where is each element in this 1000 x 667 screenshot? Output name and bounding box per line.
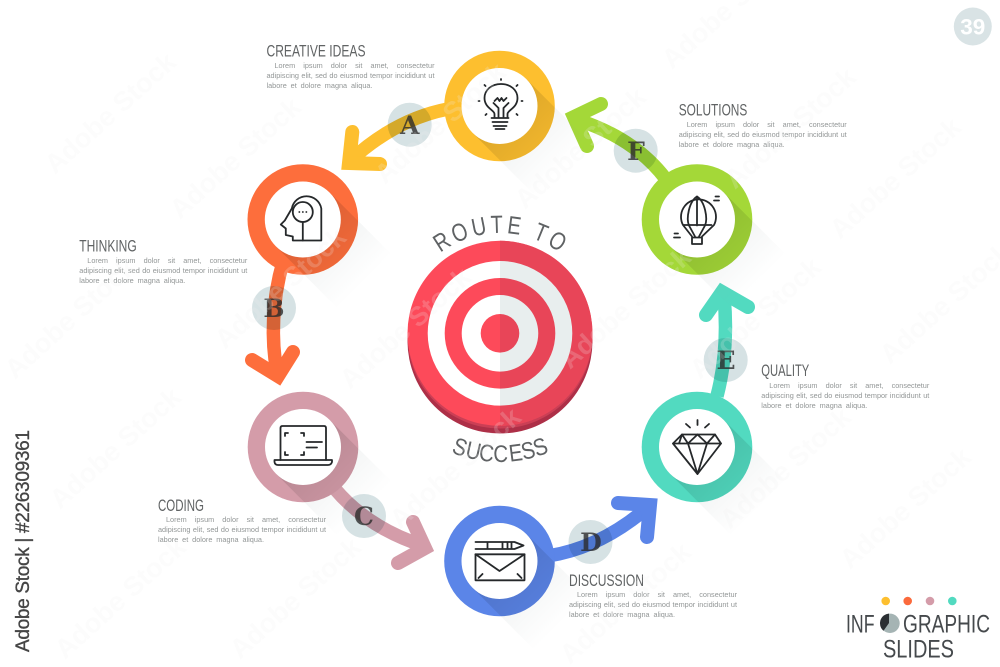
- icon: hot air balloon: [674, 196, 719, 244]
- heading: quality: QUALITY: [761, 362, 809, 380]
- badge D: [568, 520, 612, 564]
- heading: solutions: SOLUTIONS: [679, 102, 747, 120]
- stock credit: Adobe Stock | #226309361: [13, 430, 34, 652]
- text block: creative ideas: [266, 60, 434, 90]
- text block: solutions: adipiscing elit, sed do eiusmod tempor incididunt ut: [679, 130, 847, 138]
- text block: thinking: Lorem ipsum dolor sit amet, consectetur: [87, 256, 247, 265]
- curved heading: route to: T: [490, 211, 503, 239]
- arrow D: blue, discussion to quality: [548, 503, 650, 556]
- text block: coding: labore et dolore magna aliqua.: [158, 534, 264, 544]
- text block: thinking: adipiscing elit, sed do eiusmod tempor incididunt ut: [79, 266, 247, 275]
- arrow E: teal, quality to solutions: [706, 292, 748, 396]
- heading: thinking: THINKING: [79, 238, 137, 256]
- badge E: E: [716, 346, 736, 375]
- step ring: yellow with bulb icon: [444, 50, 562, 168]
- text: Adobe Stock: [0, 251, 142, 384]
- icon: envelope and pencil: [476, 542, 524, 580]
- text block: coding: [158, 514, 326, 544]
- central target: [408, 241, 592, 433]
- text block: discussion: adipiscing elit, sed do eiusmod tempor incididunt ut: [569, 600, 737, 609]
- badge A: [388, 103, 432, 147]
- page number badge: [954, 8, 992, 46]
- curved heading: route to: E: [506, 211, 523, 240]
- text: Adobe Stock: [714, 401, 857, 534]
- text block: discussion: Lorem ipsum dolor sit amet, consectetur: [577, 590, 737, 599]
- curved heading: success: U: [463, 436, 484, 466]
- text: Adobe Stock: [824, 111, 967, 244]
- curved heading: route to: O: [544, 225, 571, 257]
- badge F: [614, 129, 658, 173]
- badge C: [342, 494, 386, 538]
- badge A: A: [399, 111, 420, 140]
- text: Adobe Stock: [334, 261, 477, 394]
- text: Adobe Stock: [554, 536, 697, 667]
- curved heading: route to: [428, 211, 571, 257]
- text: Adobe Stock: [224, 531, 367, 664]
- curved heading: route to: R: [428, 226, 455, 257]
- step ring: orange with head icon: [248, 164, 364, 282]
- page number badge: 39: [960, 14, 985, 40]
- text block: quality: labore et dolore magna aliqua.: [761, 401, 867, 410]
- text: Adobe Stock: [369, 56, 512, 189]
- curved heading: success: E: [507, 439, 524, 467]
- text block: solutions: [679, 120, 847, 148]
- badge B: [252, 286, 296, 330]
- arrow C: pink, coding to discussion: [335, 489, 425, 563]
- target side edge: [408, 333, 592, 433]
- text block: thinking: labore et dolore magna aliqua.: [79, 276, 185, 285]
- curved heading: success: [449, 432, 551, 467]
- icon: laptop: [274, 426, 332, 465]
- text block: coding: adipiscing elit, sed do eiusmod tempor incididunt ut: [158, 524, 326, 534]
- badge C: C: [354, 502, 374, 531]
- logo: infographic slides: [846, 597, 990, 664]
- step ring: teal with diamond icon: [642, 392, 760, 510]
- badge E: [704, 338, 748, 382]
- text block: quality: [761, 381, 930, 410]
- text block: coding: Lorem ipsum dolor sit amet, consectetur: [166, 514, 326, 524]
- curved heading: success: S: [529, 432, 551, 462]
- step ring: pink with laptop icon: [248, 392, 366, 510]
- step ring: blue with envelope and pencil icon: [444, 506, 562, 624]
- badge B: B: [263, 294, 285, 323]
- text: Adobe Stock: [39, 46, 182, 179]
- text: Adobe Stock: [554, 241, 697, 374]
- icon: head with speech: [281, 196, 321, 240]
- text block: quality: Lorem ipsum dolor sit amet, consectetur: [769, 381, 929, 390]
- icon: diamond: [673, 420, 721, 474]
- text block: quality: adipiscing elit, sed do eiusmod tempor incididunt ut: [761, 391, 929, 400]
- curved heading: route to: U: [469, 212, 489, 242]
- icon: light bulb: [478, 79, 522, 129]
- curved heading: success: C: [493, 440, 508, 467]
- curved heading: success: C: [478, 439, 495, 467]
- badge F: F: [627, 137, 645, 166]
- text block: creative ideas: labore et dolore magna aliqua.: [266, 80, 372, 90]
- target shaded right half: [500, 241, 592, 426]
- badge D: D: [580, 528, 602, 557]
- text: Adobe Stock: [684, 251, 827, 384]
- text block: discussion: [569, 590, 737, 619]
- text: Adobe Stock: [834, 441, 977, 574]
- curved heading: success: S: [449, 432, 471, 462]
- text: Adobe Stock: [164, 91, 307, 224]
- text: Adobe Stock: [209, 221, 352, 354]
- text: Adobe Stock: [44, 381, 187, 514]
- arrow F: green, solutions to creative ideas: [574, 104, 665, 178]
- text: Adobe Stock: [509, 81, 652, 214]
- text block: creative ideas: Lorem ipsum dolor sit amet, consectetur: [274, 60, 434, 70]
- logo: infographic slides: INF: [846, 610, 874, 638]
- curved heading: route to: O: [447, 217, 472, 248]
- logo: infographic slides: SLIDES: [883, 636, 954, 664]
- text block: thinking: [79, 256, 248, 285]
- text block: solutions: labore et dolore magna aliqua.: [679, 140, 785, 148]
- curved heading: route to: T: [530, 218, 552, 248]
- step ring: green with balloon icon: [642, 164, 760, 282]
- text block: solutions: Lorem ipsum dolor sit amet, consectetur: [687, 120, 847, 128]
- text block: discussion: labore et dolore magna aliqua.: [569, 610, 675, 619]
- heading: coding: CODING: [158, 497, 204, 515]
- arrow B: orange, thinking to coding: [252, 262, 293, 376]
- text: Adobe Stock: [384, 401, 527, 534]
- heading: discussion: DISCUSSION: [569, 572, 644, 590]
- curved heading: success: S: [518, 436, 538, 465]
- arrow A: yellow, creative ideas to thinking: [349, 109, 448, 164]
- heading: creative ideas: CREATIVE IDEAS: [266, 43, 366, 61]
- text: Adobe Stock: [719, 61, 862, 194]
- text: Adobe Stock: [49, 531, 192, 664]
- text block: creative ideas: adipiscing elit, sed do eiusmod tempor incididunt ut: [266, 70, 434, 80]
